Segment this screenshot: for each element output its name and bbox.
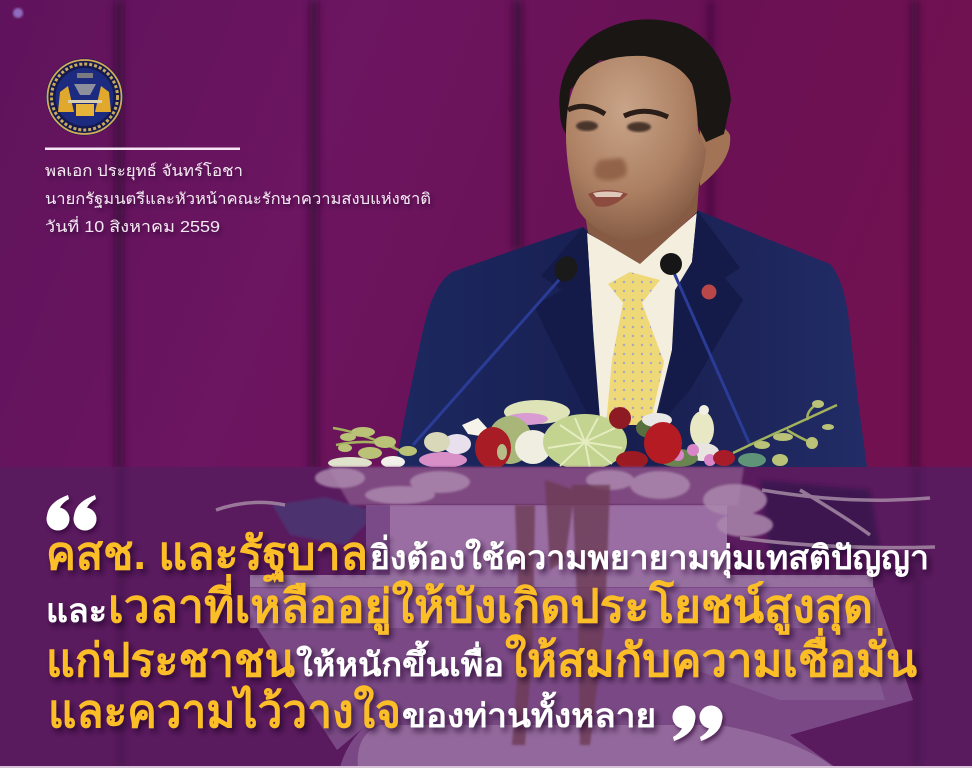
opening quotation mark: [46, 495, 96, 530]
quote line 1: [46, 527, 929, 583]
face: [566, 56, 706, 240]
translucent quote panel with podium: [0, 467, 972, 768]
closing quotation mark: [672, 706, 722, 741]
government seal: [46, 58, 123, 136]
flower arrangement: [328, 400, 837, 470]
quote line 1: คสช. และรัฐบาล: [46, 527, 368, 583]
speaker name: พลเอก ประยุทธ์ จันทร์โอชา: [45, 162, 243, 181]
right lapel: [655, 210, 743, 430]
quote text: [46, 527, 929, 737]
quote line 4: และความไว้วางใจ: [48, 684, 401, 737]
hair: [559, 19, 731, 142]
quote line 3: ให้หนักขึ้นเพื่อ: [296, 640, 504, 683]
lapel pin: [702, 284, 716, 300]
quote line 3: [46, 628, 918, 686]
quote line 1: ยิ่งต้องใช้ความพยายามทุ่มเทสติปัญญา: [370, 534, 929, 579]
quote line 2: เวลาที่เหลืออยู่ให้บังเกิดประโยชน์สูงสุด: [108, 574, 873, 635]
quote line 4: ของท่านทั้งหลาย: [402, 691, 656, 734]
quote line 2: และ: [46, 592, 107, 629]
divider rule: [45, 148, 240, 150]
hanging strands: [512, 480, 610, 745]
date: วันที่ 10 สิงหาคม 2559: [45, 216, 220, 236]
facial features: [568, 106, 668, 207]
speaker credit text: [45, 162, 431, 236]
speaker title: นายกรัฐมนตรีและหัวหน้าคณะรักษาความสงบแห่งชาติ: [45, 191, 431, 208]
tie: [606, 272, 664, 425]
quote line 3: แก่ประชาชน: [46, 634, 296, 686]
shirt: [587, 213, 697, 420]
photo: speaker at podium: [395, 19, 867, 467]
left lapel: [534, 227, 600, 420]
left microphone: [413, 253, 581, 445]
ear: [700, 126, 730, 186]
neck: [581, 170, 700, 264]
podium: [216, 467, 935, 767]
right microphone: [660, 253, 750, 445]
quote line 4: [48, 684, 656, 737]
suit jacket: [395, 210, 867, 467]
quote line 3: ให้สมกับความเชื่อมั่น: [505, 628, 918, 686]
